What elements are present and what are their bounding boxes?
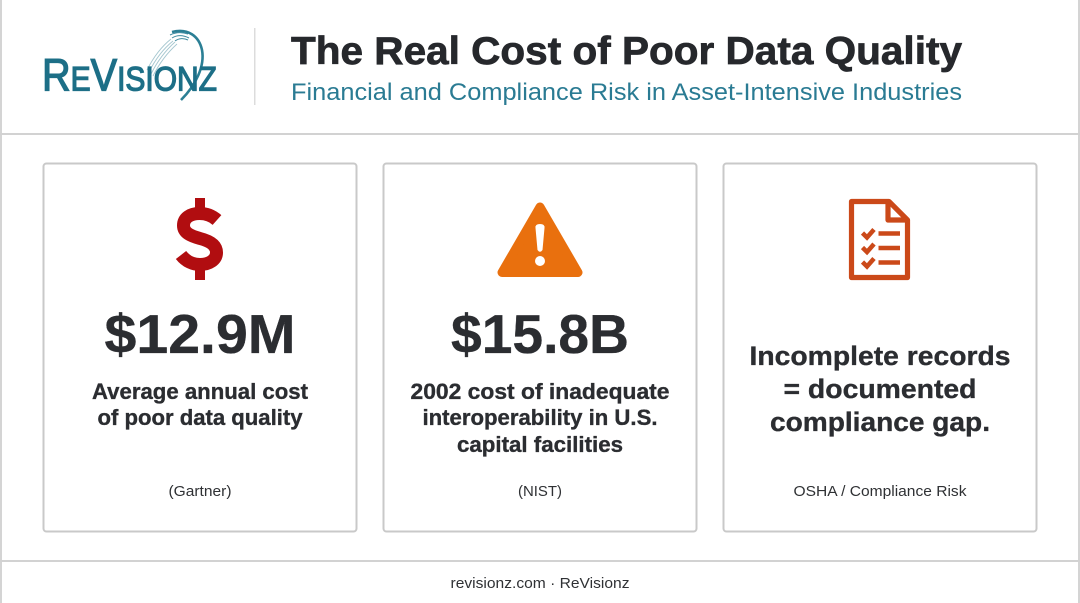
statement — [750, 341, 1010, 437]
icon: checklist document — [852, 202, 908, 278]
stat: $12.9M: $12.9M — [104, 303, 296, 365]
source: (NIST) — [518, 484, 562, 500]
logo: ReVisionZ: REVISIONZ — [42, 50, 217, 100]
source: (Gartner) — [168, 484, 232, 500]
description — [92, 379, 309, 430]
icon: warning triangle — [502, 207, 578, 272]
footer: revisionz.com · ReVisionz — [450, 575, 630, 592]
description: 2002 cost of inadequate — [410, 379, 670, 404]
description: Average annual cost — [92, 379, 309, 404]
subtitle: Financial and Compliance Risk in Asset-Intensive Industries — [291, 79, 962, 106]
description: capital facilities — [457, 432, 623, 457]
title: The Real Cost of Poor Data Quality — [291, 30, 962, 73]
description: of poor data quality — [98, 405, 303, 430]
stat: $15.8B: $15.8B — [451, 303, 629, 365]
panel: compliance risk — [724, 164, 1036, 532]
statement: = documented — [784, 374, 976, 404]
statement: compliance gap. — [770, 407, 990, 437]
panel: interoperability cost — [384, 164, 696, 532]
description — [410, 379, 670, 457]
source: OSHA / Compliance Risk — [794, 484, 967, 500]
icon: dollar sign — [181, 198, 217, 280]
description: interoperability in U.S. — [422, 405, 658, 430]
panel: financial cost — [44, 164, 356, 532]
statement: Incomplete records — [750, 341, 1010, 371]
